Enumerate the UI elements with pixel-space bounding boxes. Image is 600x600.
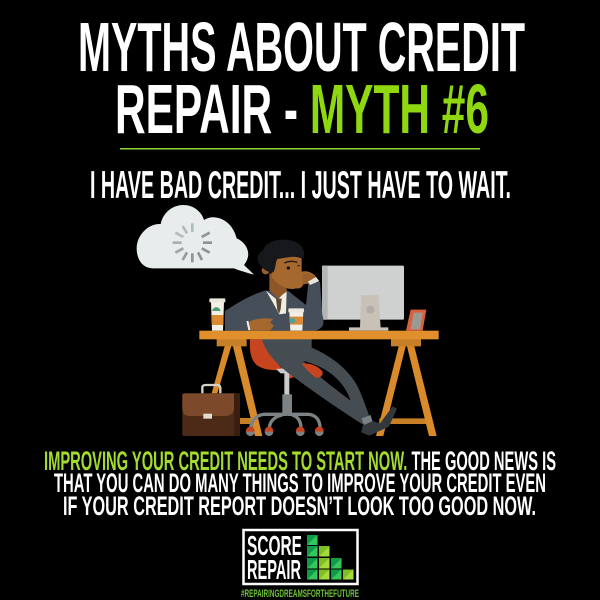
body text	[44, 446, 556, 521]
icon: briefcase	[182, 385, 240, 436]
title	[78, 8, 525, 148]
logo wordmark	[247, 530, 302, 585]
icon: picture frame	[406, 310, 426, 331]
icon: desk top	[199, 331, 439, 346]
logo hashtag: #REPAIRINGDREAMSFORTHEFUTURE	[241, 588, 359, 600]
man's jacket	[225, 282, 323, 331]
man's hair	[258, 240, 304, 272]
icon: desk legs	[212, 345, 437, 436]
logo wordmark: REPAIR	[247, 554, 301, 585]
man's hand	[247, 318, 274, 331]
man's shirt and tie	[266, 290, 287, 314]
logo: Score Repair	[241, 530, 359, 600]
logo staircase squares	[307, 535, 354, 580]
illustration: man waiting at desk	[137, 205, 439, 436]
icon: computer monitor	[322, 266, 404, 331]
icon: man's legs	[262, 338, 397, 436]
icon: coffee cup, right	[288, 308, 304, 331]
logo wordmark: SCORE	[247, 530, 302, 561]
title: REPAIR - MYTH #6	[115, 70, 489, 148]
icon: thought cloud with loading spinner	[137, 205, 254, 275]
man's neck and face	[262, 256, 319, 298]
icon: man's upper body	[225, 240, 323, 331]
icon: chair	[246, 339, 324, 436]
icon: coffee cup, left	[209, 298, 225, 331]
